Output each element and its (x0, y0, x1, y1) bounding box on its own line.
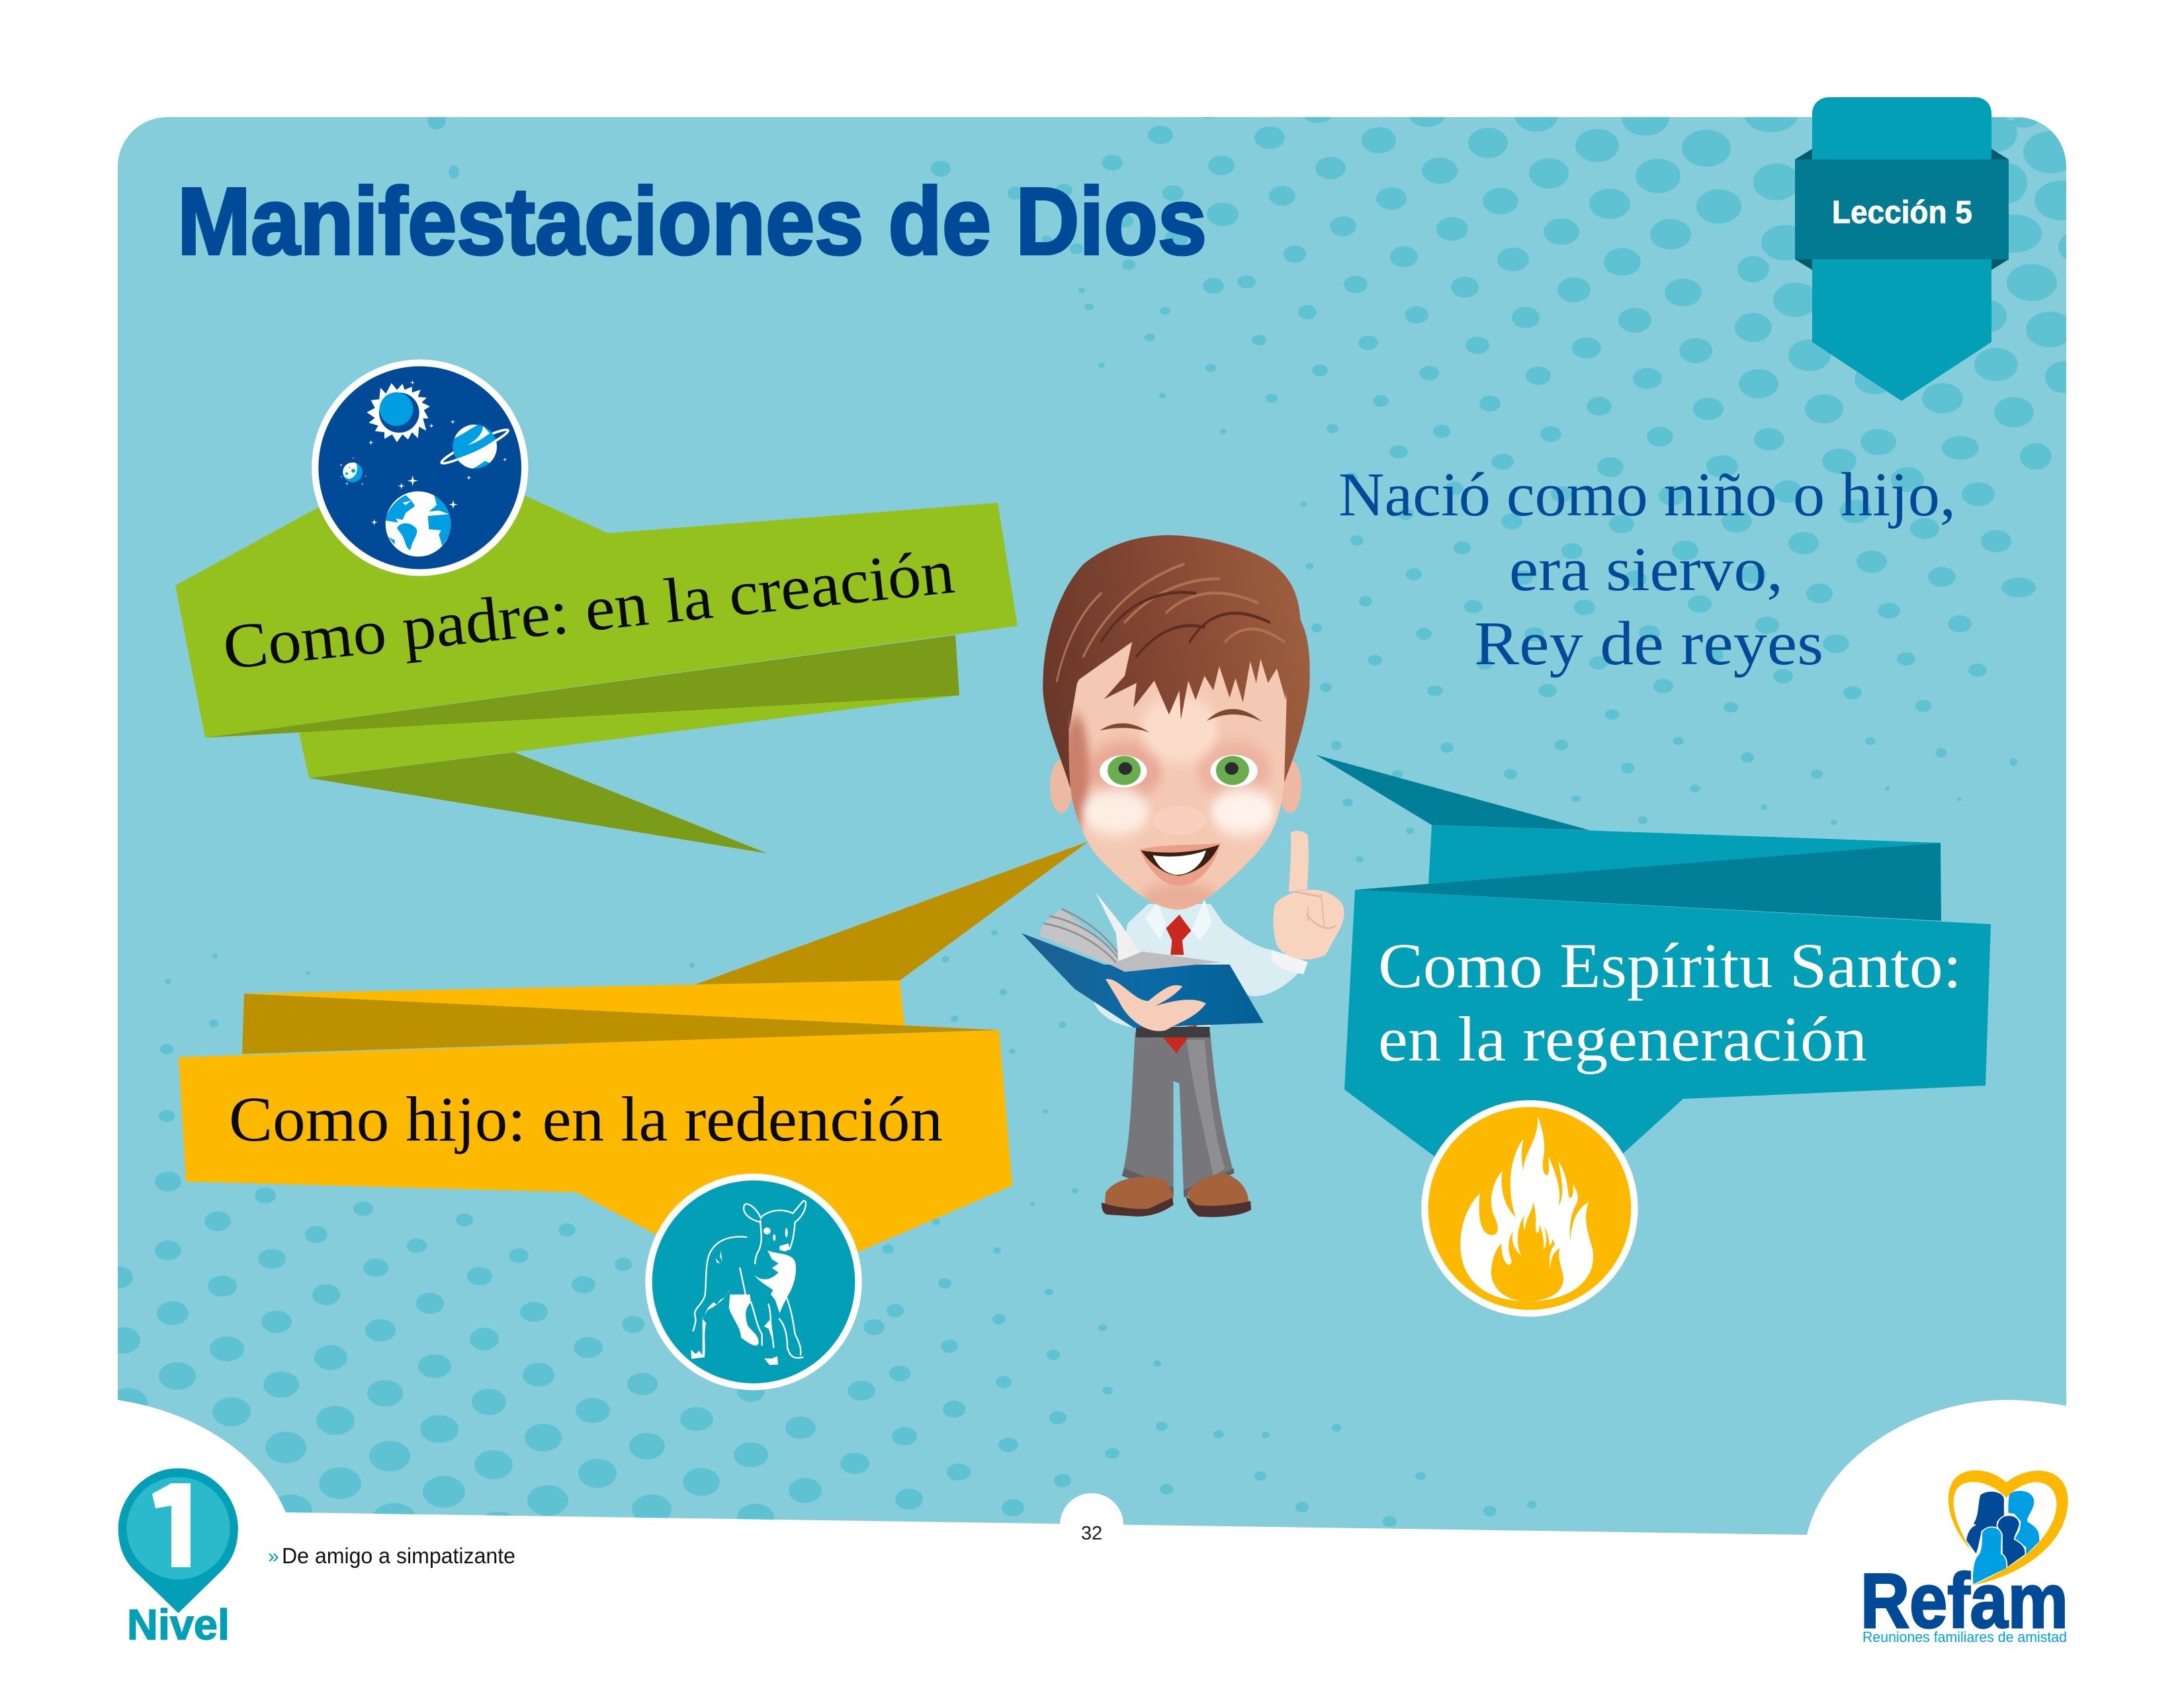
boy: shoes (1102, 1174, 1251, 1217)
boy: pointing hand (1274, 831, 1344, 959)
boy: trousers (1122, 1033, 1234, 1197)
boy: mouth (1139, 844, 1221, 886)
green ribbon text: Como padre: en la creación (220, 535, 957, 683)
boy: tie (1157, 914, 1197, 1053)
logo tagline: Reuniones familiares de amistad (1862, 1629, 2067, 1645)
level number (152, 1483, 191, 1567)
level pin (118, 1468, 238, 1613)
character: boy with book (1022, 535, 1344, 1217)
title: Manifestaciones de Dios (177, 168, 1207, 275)
logo heart with family (1948, 1471, 2068, 1585)
level label: Nivel (127, 1600, 230, 1649)
icon: moon (343, 462, 363, 482)
icon: ringed planet (439, 423, 510, 470)
level number: 1 (147, 1461, 213, 1592)
icon: stars (339, 380, 507, 525)
text block: Nació como niño: Nació como niño o hijo, (1338, 460, 1956, 529)
boy: belt (1136, 1027, 1210, 1037)
boy: eyes (1100, 755, 1258, 787)
boy: eyebrows (1100, 709, 1262, 732)
page number (1060, 1493, 1123, 1557)
boy: hair back (1043, 535, 1310, 787)
icon: lamb (645, 1174, 862, 1390)
teal ribbon text: Como Espíritu Santo: (1378, 930, 1962, 1001)
boy: ears (1050, 759, 1301, 813)
logo: Refam (1860, 1471, 2068, 1645)
boy: shirt (1092, 904, 1308, 1027)
page number: 32 (1081, 1523, 1102, 1544)
teal ribbon text (1378, 930, 1962, 1074)
icon: flame (1421, 1100, 1638, 1317)
text block: Nació como niño: Rey de reyes (1474, 609, 1823, 678)
yellow ribbon text: Como hijo: en la redención (229, 1084, 943, 1154)
footer book title: » (268, 1545, 279, 1567)
boy: face (1069, 642, 1287, 910)
boy: hand on book (1106, 979, 1206, 1031)
boy: collar (1145, 899, 1212, 940)
panel: green ribbon "Como padre" (175, 450, 1018, 853)
icon: earth (385, 492, 453, 556)
footer book title: De amigo a simpatizante (282, 1543, 515, 1568)
logo wordmark: Refam (1860, 1557, 2068, 1644)
teal ribbon text: en la regeneración (1378, 1004, 1867, 1074)
text block: Nació como niño (1338, 460, 1956, 678)
panel: background (118, 117, 2066, 1535)
text block: Nació como niño: era siervo, (1509, 535, 1783, 604)
boy: nose (1153, 806, 1206, 835)
panel: yellow ribbon "Como hijo" (179, 842, 1088, 1310)
lesson label: Lección 5 (1832, 195, 1972, 230)
boy: fringe (1057, 564, 1288, 729)
icon: creation (sun, planets, earth) (312, 359, 528, 576)
panel: teal ribbon "Como Espíritu Santo" (1316, 755, 1991, 1257)
icon: sun (367, 383, 430, 442)
lesson ribbon badge (1795, 97, 2009, 401)
boy: cuff (1271, 950, 1308, 974)
boy: book (1022, 892, 1264, 1027)
